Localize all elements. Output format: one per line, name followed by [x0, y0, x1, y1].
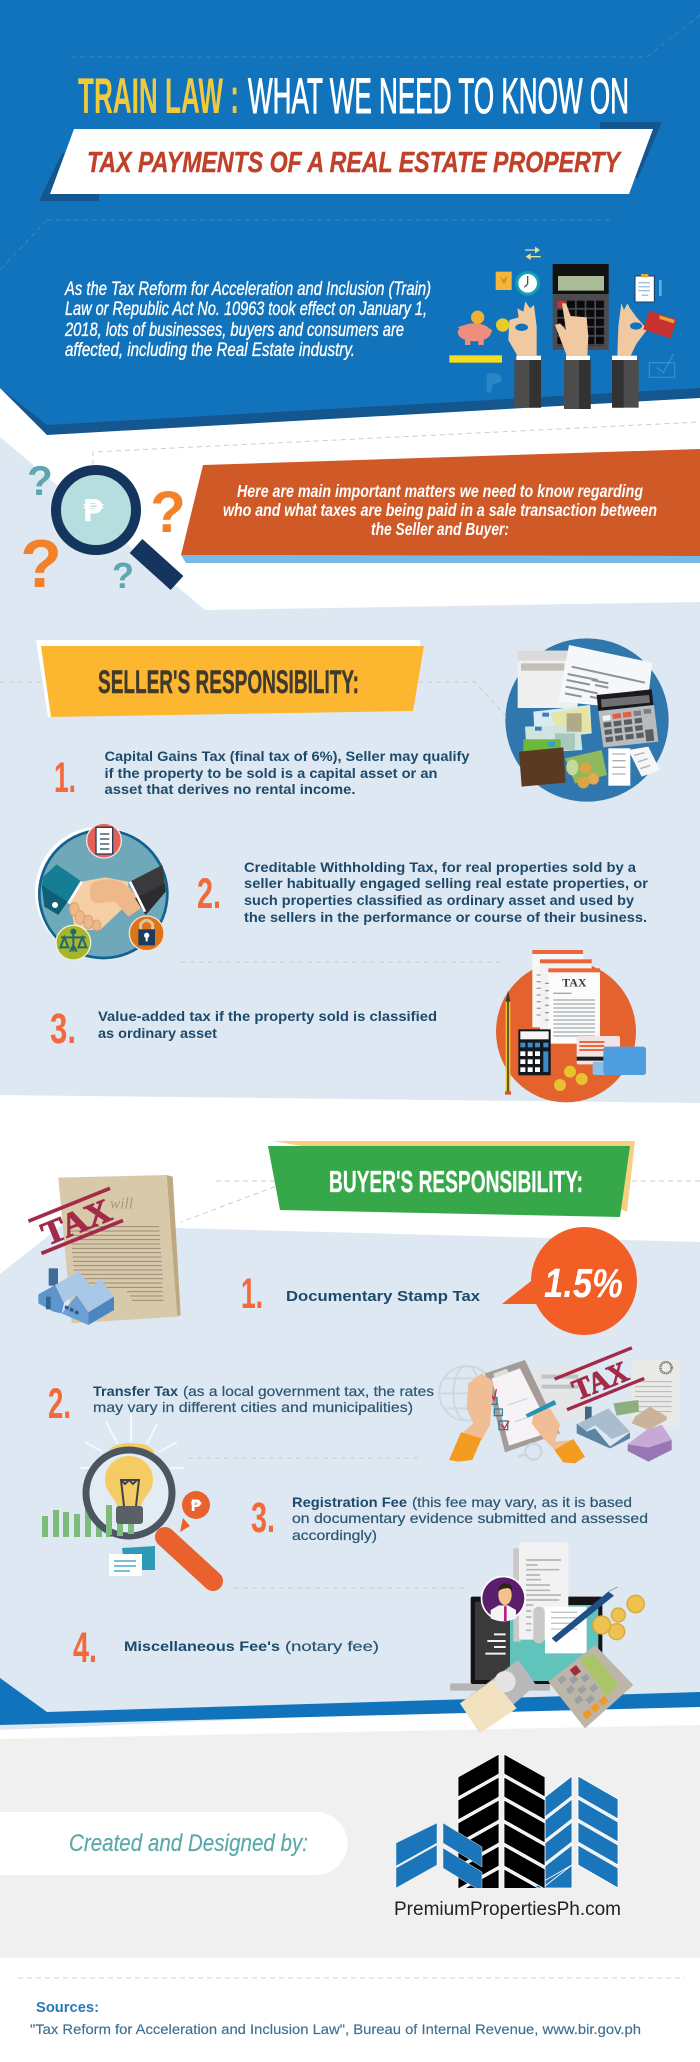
intro text: As the Tax Reform for Acceleration and Inclusion (Train) [64, 279, 431, 300]
item 2 text: such properties classified as ordinary asset and used by [244, 892, 634, 908]
item 4 buyer text: Miscellaneous Fee's [124, 1638, 280, 1654]
icon: magnifying glass with question marks: ? [20, 526, 62, 602]
item 2 text: 2. [197, 870, 221, 918]
item 4 buyer text: 4. [73, 1624, 97, 1672]
illustration: signing tax documents with houses: TAX [568, 1356, 633, 1407]
item 3 buyer text: 3. [251, 1494, 275, 1542]
callout: 1.5% bubble [502, 1227, 637, 1335]
item 3 text [50, 1005, 437, 1053]
item 3 text: 3. [50, 1005, 76, 1053]
item 4 buyer text: (notary fee) [285, 1638, 379, 1654]
callout: 1.5% bubble: 1.5% [544, 1260, 623, 1306]
item 4 buyer text [73, 1624, 379, 1672]
item 2 buyer text: (as a local government tax, the rates [183, 1383, 434, 1399]
sources: "Tax Reform for Acceleration and Inclusion Law", Bureau of Internal Revenue, www.bir.gov.ph [30, 2021, 641, 2037]
item 3 buyer text: (this fee may vary, as it is based [412, 1494, 632, 1510]
item 1 text: asset that derives no rental income. [104, 781, 356, 797]
illustration: light bulb in magnifying glass: ₱ [190, 1496, 202, 1515]
illustration: tax papers, calculator and card: TAX [562, 976, 587, 990]
illustration: handshake [35, 823, 167, 960]
item 2 buyer text [48, 1380, 434, 1428]
header panel [0, 0, 700, 425]
intro text: 2018, lots of businesses, buyers and consumers are [64, 320, 404, 341]
item 1 buyer text: 1. [241, 1270, 263, 1318]
item 2 buyer text: Transfer Tax [93, 1383, 178, 1399]
title [78, 68, 629, 124]
intro text: affected, including the Real Estate industry. [65, 340, 355, 361]
intro text [64, 279, 431, 361]
heading: seller's responsibility [36, 640, 424, 717]
sources [30, 1999, 641, 2037]
illustration: light bulb in magnifying glass [42, 1414, 213, 1581]
item 2 text: seller habitually engaged selling real estate properties, or [244, 875, 649, 891]
callout banner [181, 449, 700, 563]
item 3 buyer text [251, 1494, 648, 1543]
item 2 buyer text: 2. [48, 1380, 71, 1428]
item 1 text: Capital Gains Tax (final tax of 6%), Seller may qualify [104, 748, 470, 764]
item 3 text: Value-added tax if the property sold is classified [98, 1008, 437, 1024]
intro text: Law or Republic Act No. 10963 took effect on January 1, [65, 299, 427, 320]
buyer section bottom band [0, 1678, 700, 1725]
item 2 buyer text: may vary in different cities and municipalities) [93, 1399, 413, 1415]
illustration: will document with tax stamp and house: TAX [36, 1192, 117, 1253]
title: TRAIN LAW : [78, 68, 239, 124]
logo: premium properties buildings: PremiumPropertiesPh.com [394, 1899, 621, 1920]
item 2 text: the sellers in the performance or course of their business. [244, 909, 647, 925]
icon: magnifying glass with question marks: ? [150, 480, 186, 545]
item 1 text: 1. [54, 754, 76, 802]
illustration: hands on calculator [449, 247, 677, 409]
buyer section background [0, 1225, 700, 1730]
item 1 text: if the property to be sold is a capital asset or an [104, 765, 438, 781]
illustration: signing tax documents with houses [439, 1346, 680, 1463]
icon: magnifying glass with question marks: ₱ [83, 494, 104, 529]
item 2 text [197, 859, 649, 925]
seller section background [0, 437, 700, 1103]
illustration: will document with tax stamp and house: will [110, 1195, 133, 1212]
footer credit panel [0, 1725, 700, 1958]
item 3 buyer text: on documentary evidence submitted and assessed [292, 1510, 648, 1526]
item 1 buyer text [241, 1270, 481, 1318]
credit pill [0, 1812, 348, 1875]
icon: magnifying glass with question marks: ? [27, 457, 53, 504]
item 3 buyer text: Registration Fee [292, 1494, 407, 1510]
callout banner: the Seller and Buyer: [371, 519, 509, 539]
sources: Sources: [36, 1999, 99, 2016]
item 1 buyer text: Documentary Stamp Tax [286, 1288, 481, 1305]
illustration: tax papers, calculator and card [496, 950, 646, 1102]
illustration: laptop, documents, coins and calculator [450, 1542, 644, 1733]
logo: premium properties buildings [394, 1754, 621, 1920]
subtitle banner [39, 122, 662, 201]
item 2 text: Creditable Withholding Tax, for real properties sold by a [244, 859, 636, 875]
header panel shadow [0, 370, 700, 435]
heading: buyer's responsibility [268, 1141, 635, 1217]
heading: seller's responsibility: SELLER'S RESPONSIBILITY: [98, 664, 359, 700]
item 1 text [54, 748, 470, 802]
illustration: papers, calculator and wallet [505, 638, 669, 802]
item 3 text: as ordinary asset [98, 1025, 217, 1041]
illustration: will document with tax stamp and house [28, 1175, 181, 1325]
credit pill: Created and Designed by: [69, 1830, 308, 1857]
item 3 buyer text: accordingly) [292, 1527, 377, 1543]
icon: magnifying glass with question marks: ? [112, 555, 134, 596]
icon: magnifying glass with question marks [20, 457, 186, 602]
